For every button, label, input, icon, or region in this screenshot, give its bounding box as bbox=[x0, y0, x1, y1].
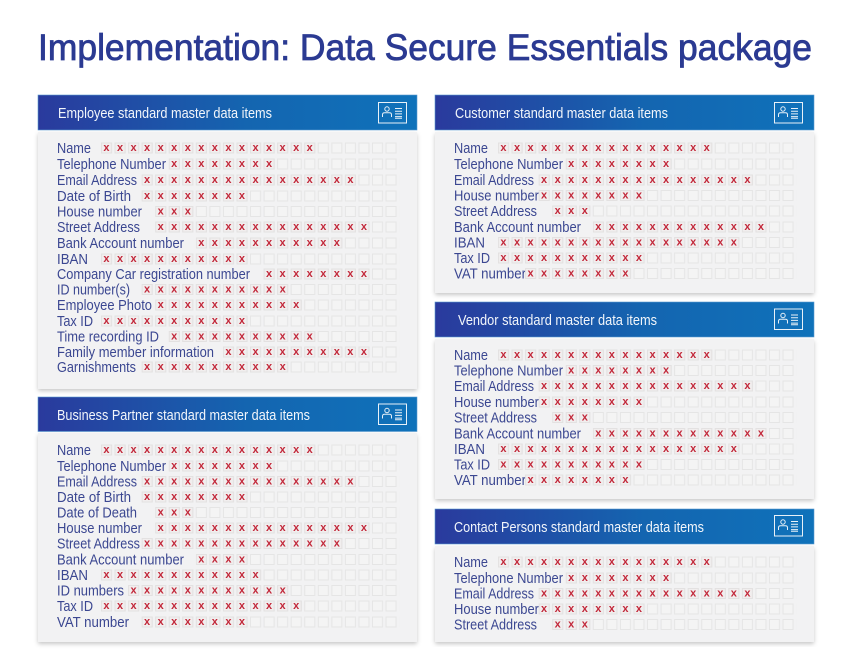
row: House number bbox=[454, 188, 796, 204]
row: VAT number: xxxxxxxx bbox=[144, 616, 252, 628]
row: Email Address bbox=[454, 173, 796, 189]
row: VAT number: xxxxxxxx bbox=[528, 474, 636, 486]
row: VAT number bbox=[454, 473, 796, 489]
panel header bbox=[38, 397, 417, 432]
row: Bank Account number: Bank Account number bbox=[454, 426, 581, 442]
panel header: Vendor standard master data items bbox=[458, 313, 657, 329]
row: Street Address bbox=[57, 536, 399, 552]
row: Bank Account number: xxxxxxxxxxxxx bbox=[595, 221, 771, 233]
row: Name: Name bbox=[57, 141, 91, 157]
row: Tax ID: xxxxxxxxxxx bbox=[500, 252, 649, 264]
row: Date of Death bbox=[57, 506, 399, 522]
row: Date of Birth: xxxxxxxx bbox=[144, 190, 252, 202]
row: Bank Account number bbox=[57, 552, 399, 568]
row: House number bbox=[454, 395, 796, 411]
panel: Contact Persons standard master data items bbox=[435, 509, 814, 642]
row: IBAN: IBAN bbox=[57, 252, 88, 268]
row: Name: Name bbox=[454, 555, 488, 571]
panel body bbox=[38, 433, 417, 642]
row: Bank Account number: Bank Account number bbox=[57, 236, 184, 252]
row: Street Address bbox=[454, 204, 796, 220]
row: Name bbox=[454, 348, 796, 364]
panel: Business Partner standard master data items bbox=[38, 397, 417, 642]
row: Name: xxxxxxxxxxxxxxxx bbox=[103, 142, 320, 154]
row: Street Address: xxxxxxxxxxxxxxxx bbox=[158, 221, 374, 233]
row: IBAN: IBAN bbox=[454, 442, 485, 458]
row: Email Address bbox=[57, 173, 399, 189]
row: Bank Account number: xxxxxxxxxxx bbox=[198, 237, 347, 249]
row: Street Address bbox=[454, 410, 796, 426]
row: Name bbox=[454, 555, 796, 571]
panel body bbox=[435, 132, 814, 293]
row: Name bbox=[57, 443, 399, 459]
row: Bank Account number: Bank Account number bbox=[454, 220, 581, 236]
title: Implementation: Data Secure Essentials package bbox=[38, 27, 812, 68]
panel header bbox=[38, 95, 417, 130]
panel body bbox=[38, 132, 417, 389]
row: Street Address: xxx bbox=[555, 412, 595, 424]
row: Email Address bbox=[454, 379, 796, 395]
row: Street Address: Street Address bbox=[57, 220, 140, 236]
row: Bank Account number bbox=[57, 236, 399, 252]
row: Telephone Number: Telephone Number bbox=[454, 364, 563, 380]
panel header bbox=[435, 509, 814, 544]
row: Employee Photo: Employee Photo bbox=[57, 298, 152, 314]
row: House number: House number bbox=[454, 188, 539, 204]
row: IBAN bbox=[57, 252, 399, 268]
row: Email Address: xxxxxxxxxxxxxxxx bbox=[144, 476, 361, 488]
row: Tax ID: xxxxxxxxxxx bbox=[103, 315, 252, 327]
row: VAT number: VAT number bbox=[57, 615, 129, 631]
row: Garnishments bbox=[57, 360, 399, 376]
row: Email Address bbox=[454, 586, 796, 602]
row: VAT number: VAT number bbox=[454, 473, 526, 489]
panel header: Employee standard master data items bbox=[58, 106, 272, 122]
row: House number: xxxxxxxx bbox=[541, 396, 649, 408]
row: VAT number bbox=[57, 615, 399, 631]
row: Garnishments: Garnishments bbox=[57, 360, 136, 376]
row: House number: xxx bbox=[158, 206, 198, 218]
row: House number: xxxxxxxx bbox=[541, 603, 649, 615]
row: Street Address: Street Address bbox=[454, 618, 537, 634]
panel header: Customer standard master data items bbox=[455, 106, 668, 122]
row: Telephone Number: Telephone Number bbox=[454, 157, 563, 173]
row: Telephone Number: xxxxxxxx bbox=[568, 158, 677, 170]
row: IBAN: IBAN bbox=[454, 236, 485, 252]
panel: Customer standard master data items bbox=[435, 95, 814, 293]
row: ID number(s): xxxxxxxxxxx bbox=[144, 284, 293, 296]
row: House number: House number bbox=[454, 602, 539, 618]
row: Street Address: Street Address bbox=[454, 204, 537, 220]
row: House number bbox=[57, 204, 399, 220]
icon: person card bbox=[774, 102, 802, 123]
row: Street Address: Street Address bbox=[57, 536, 140, 552]
row: Name: xxxxxxxxxxxxxxxx bbox=[500, 142, 717, 154]
row: Street Address: xxx bbox=[555, 618, 595, 630]
row: ID numbers: ID numbers bbox=[57, 584, 124, 600]
row: Tax ID: xxxxxxxxxxx bbox=[500, 458, 649, 470]
row: Employee Photo bbox=[57, 298, 399, 314]
row: IBAN: xxxxxxxxxxxxxxxxxx bbox=[500, 236, 744, 248]
row: Name: xxxxxxxxxxxxxxxx bbox=[500, 556, 717, 568]
row: Time recording ID bbox=[57, 330, 399, 346]
row: Street Address: Street Address bbox=[454, 410, 537, 426]
row: Name: xxxxxxxxxxxxxxxx bbox=[103, 444, 320, 456]
row: Name: Name bbox=[454, 348, 488, 364]
row: Street Address bbox=[454, 618, 796, 634]
row: Telephone Number: xxxxxxxx bbox=[171, 460, 280, 472]
row: Garnishments: xxxxxxxxxxx bbox=[144, 361, 293, 373]
panel header bbox=[435, 95, 814, 130]
row: Telephone Number: Telephone Number bbox=[57, 157, 166, 173]
row: Bank Account number bbox=[454, 220, 796, 236]
row: Bank Account number: xxxx bbox=[198, 554, 252, 566]
row: ID number(s) bbox=[57, 282, 399, 298]
row: VAT number bbox=[454, 266, 796, 282]
row: Tax ID bbox=[57, 314, 399, 330]
row: Telephone Number bbox=[57, 157, 399, 173]
row: Bank Account number: xxxxxxxxxxxxx bbox=[595, 428, 771, 440]
row: Street Address: xxxxxxxxxxxxxxx bbox=[144, 538, 347, 550]
row: Street Address: xxx bbox=[555, 205, 595, 217]
row: Time recording ID: xxxxxxxxxxx bbox=[171, 330, 320, 342]
row: Telephone Number: Telephone Number bbox=[57, 459, 166, 475]
row: Company Car registration number: xxxxxxxx bbox=[266, 268, 374, 280]
row: Email Address: xxxxxxxxxxxxxxxx bbox=[541, 380, 758, 392]
row: Tax ID: Tax ID bbox=[454, 458, 490, 474]
row: Name: xxxxxxxxxxxxxxxx bbox=[500, 349, 717, 361]
row: Name bbox=[57, 141, 399, 157]
row: Tax ID bbox=[454, 458, 796, 474]
row: VAT number: xxxxxxxx bbox=[528, 268, 636, 280]
row: House number bbox=[57, 521, 399, 537]
row: House number: xxxxxxxxxxxxxxxx bbox=[158, 522, 374, 534]
row: ID numbers bbox=[57, 584, 399, 600]
row: Street Address bbox=[57, 220, 399, 236]
panel header: Business Partner standard master data items bbox=[57, 408, 310, 424]
row: Tax ID bbox=[57, 599, 399, 615]
row: Tax ID bbox=[454, 251, 796, 267]
row: Date of Death: Date of Death bbox=[57, 506, 137, 522]
row: Tax ID: Tax ID bbox=[57, 314, 93, 330]
row: Bank Account number bbox=[454, 426, 796, 442]
row: House number: House number bbox=[454, 395, 539, 411]
row: Email Address: Email Address bbox=[454, 586, 534, 602]
row: IBAN: xxxxxxxxxxxx bbox=[103, 569, 266, 581]
row: IBAN bbox=[454, 236, 796, 252]
row: Family member information bbox=[57, 345, 399, 361]
row: House number bbox=[454, 602, 796, 618]
row: IBAN: xxxxxxxxxxxxxxxxxx bbox=[500, 443, 744, 455]
row: ID number(s): ID number(s) bbox=[57, 282, 130, 298]
row: VAT number: VAT number bbox=[454, 266, 526, 282]
row: Tax ID: xxxxxxxxxxxxxxx bbox=[103, 600, 307, 612]
row: Telephone Number bbox=[454, 157, 796, 173]
row: Telephone Number: Telephone Number bbox=[454, 571, 563, 587]
row: IBAN bbox=[57, 568, 399, 584]
row: Name bbox=[454, 141, 796, 157]
row: Company Car registration number bbox=[57, 267, 399, 283]
row: Date of Birth: Date of Birth bbox=[57, 189, 131, 205]
row: House number: xxxxxxxx bbox=[541, 190, 649, 202]
row: Email Address: xxxxxxxxxxxxxxxx bbox=[144, 174, 361, 186]
panel body bbox=[435, 339, 814, 499]
row: Email Address: Email Address bbox=[57, 173, 137, 189]
row: Date of Birth bbox=[57, 189, 399, 205]
row: Email Address: Email Address bbox=[57, 474, 137, 490]
row: IBAN bbox=[454, 442, 796, 458]
row: ID numbers: xxxxxxxxxxxx bbox=[130, 584, 293, 596]
row: Company Car registration number: Company Car registration number bbox=[57, 267, 250, 283]
row: Date of Death: xxx bbox=[158, 506, 198, 518]
row: Email Address: xxxxxxxxxxxxxxxx bbox=[541, 174, 758, 186]
row: Tax ID: Tax ID bbox=[57, 599, 93, 615]
row: Date of Birth bbox=[57, 490, 399, 506]
panel header: Contact Persons standard master data items bbox=[454, 520, 704, 536]
icon: person card bbox=[378, 404, 406, 424]
panel body bbox=[435, 546, 814, 642]
panel: Vendor standard master data items bbox=[435, 302, 814, 499]
row: Telephone Number bbox=[454, 571, 796, 587]
panel: Employee standard master data items bbox=[38, 95, 417, 389]
row: Date of Birth: xxxxxxxx bbox=[144, 491, 252, 503]
row: House number: House number bbox=[57, 521, 142, 537]
row: Email Address: Email Address bbox=[454, 173, 534, 189]
icon: person card bbox=[774, 516, 802, 536]
row: Family member information: xxxxxxxxxxx bbox=[225, 346, 374, 358]
row: Tax ID: Tax ID bbox=[454, 251, 490, 267]
row: Employee Photo: xxxxxxxxxxx bbox=[158, 299, 307, 311]
row: Email Address: xxxxxxxxxxxxxxxx bbox=[541, 588, 758, 600]
row: Time recording ID: Time recording ID bbox=[57, 330, 159, 346]
icon: person card bbox=[774, 309, 802, 330]
row: House number: House number bbox=[57, 204, 142, 220]
row: Telephone Number: xxxxxxxx bbox=[171, 158, 280, 170]
panel header bbox=[435, 302, 814, 337]
row: Bank Account number: Bank Account number bbox=[57, 552, 184, 568]
row: IBAN: IBAN bbox=[57, 568, 88, 584]
row: Name: Name bbox=[57, 443, 91, 459]
row: Email Address: Email Address bbox=[454, 379, 534, 395]
row: Telephone Number bbox=[57, 459, 399, 475]
row: Telephone Number: xxxxxxxx bbox=[568, 572, 677, 584]
row: Telephone Number: xxxxxxxx bbox=[568, 364, 677, 376]
row: Telephone Number bbox=[454, 364, 796, 380]
icon: person card bbox=[378, 102, 406, 123]
row: IBAN: xxxxxxxxxxx bbox=[103, 253, 252, 265]
row: Family member information: Family member information bbox=[57, 345, 214, 361]
row: Name: Name bbox=[454, 141, 488, 157]
row: Email Address bbox=[57, 474, 399, 490]
row: Date of Birth: Date of Birth bbox=[57, 490, 131, 506]
